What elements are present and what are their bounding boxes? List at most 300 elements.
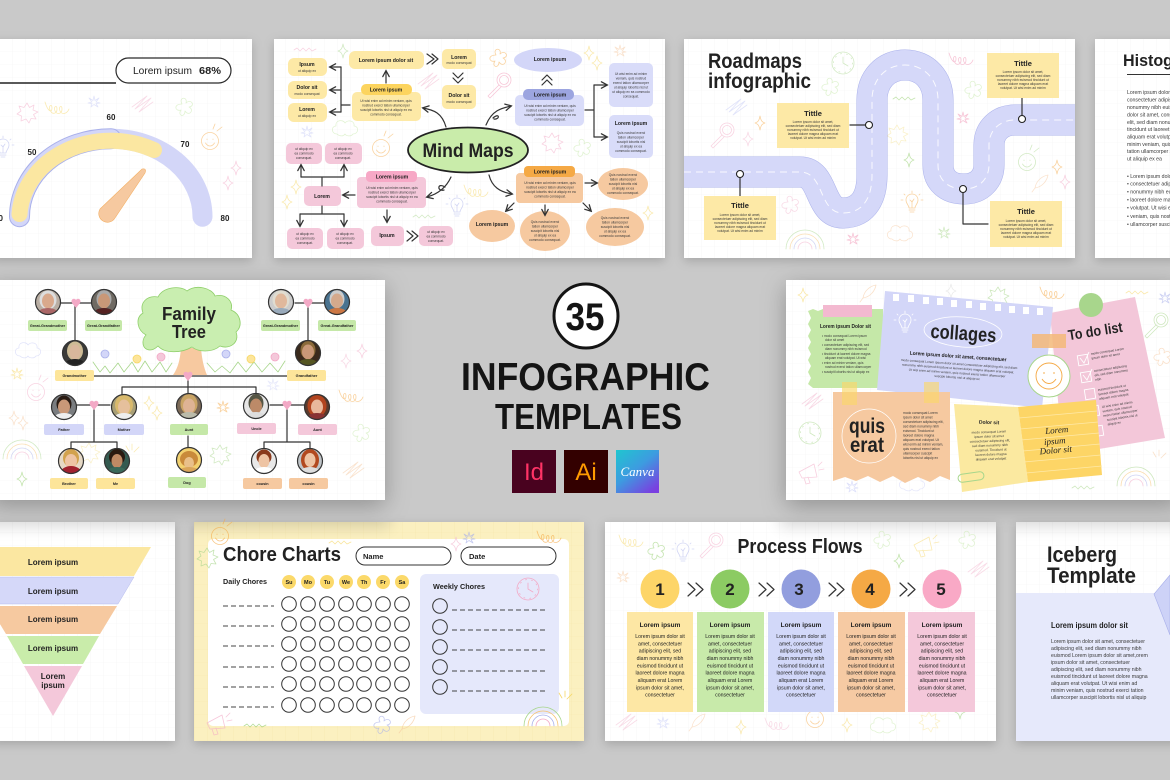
yellow branch: modo consequat [446,100,472,104]
yellow branch: Dolor sit [296,85,318,91]
yellow notebook note [954,400,1102,492]
family name tags: Aunt [185,428,194,432]
callout: tittle 2: consectetuer adipiscing elit, sed diam [996,74,1051,78]
callout: tittle 2: volutpat. Ut wisi enim ad minim [1000,86,1046,90]
panel: collages [786,280,1170,500]
yellow branch: nostrud exerci tation ullamcorper [362,104,411,108]
orange branch: suscipit lobortis nisl [601,225,629,229]
step 5 card: Lorem ipsum dolor sit [917,634,967,640]
step 3 card: aliquam erat Lorem [779,678,823,684]
pink branch: ea commodo [426,234,446,238]
step 1 card: diam nonummy nibh [637,656,683,662]
iceberg text block: Lorem ipsum dolor sit amet, consectetuer [1051,639,1145,645]
iceberg title: Iceberg [1047,542,1117,567]
weekday badges [282,575,409,589]
doodles: roadmaps card [711,52,1070,249]
callout: tittle 1: Lorem ipsum dolor sit amet, [793,120,833,124]
purple branch: ut aliquip ex ea commodo [612,90,650,94]
pink branch: ut aliquip ex [296,232,314,236]
orange note: quis erat: consectetuer adipiscing elit, [903,420,944,424]
pink branch: ut aliquip ex [334,147,352,151]
yellow notebook note: Lorem [1044,424,1069,436]
weekday badges: Th [361,580,368,586]
step circles: 4 [865,580,875,599]
pyramid labels: Lorem ipsum [28,615,78,624]
central bubble: Mind Maps: Mind Maps [422,140,514,162]
step circles: 3 [794,580,804,599]
purple branch: Ut wisi enim ad minim [615,72,647,76]
family name tags: Great-Grandmother [30,324,66,328]
family name tags: Me [113,482,118,486]
pyramid labels: ipsum [41,681,65,690]
step 2 card: consectetuer [715,692,745,698]
step 2 card [697,612,764,712]
callout: tittle 3: Lorem ipsum dolor sit amet, [720,213,760,217]
name field [356,547,451,565]
grass and flowers [93,350,285,373]
panel: mind maps [274,39,665,258]
yellow branch: Lorem ipsum [370,88,403,94]
orange note: quis erat: lobortis nisl ut aliquip ex [903,456,938,460]
pink branch: ut aliquip ex [336,232,354,236]
central bubble: Mind Maps [408,128,528,172]
pink note: to do list: aliquam erat volutpat [1099,392,1129,401]
yellow notebook note: euismod. Tincidunt ut [975,447,1007,453]
iceberg text block: minim veniam, quis nostrud exerci tation [1051,688,1144,694]
step 4 card: consectetuer [856,692,886,698]
callout: tittle 1: nonummy nibh euismod tincidunt ut [787,128,839,132]
icon: Illustrator [564,450,608,493]
purple branch: Lorem ipsum [615,121,648,127]
purple branch: suscipit lobortis nisl ut aliquip ex ea [524,113,576,117]
step 2 card: euismod tincidunt ut [707,664,754,670]
family name tags: Father [58,428,70,432]
pink branch: ea commodo [295,236,315,240]
date field: Date [469,552,485,561]
icon: Canva [616,450,659,493]
yellow notebook note: sed diam nonummy nibh [972,443,1008,448]
step 3 card: consectetuer [786,692,816,698]
orange note: quis erat: laoreet dolore magna [903,434,934,438]
step 4 card: aliquam erat Lorem [849,678,893,684]
step circles: 2 [725,580,735,599]
daily checklist grid [282,597,409,712]
pyramid labels [28,558,78,690]
icon: Illustrator: Ai [575,459,597,486]
centre: heading: INFOGRAPHIC [461,356,710,399]
step 5 card: adipiscing elit, sed [921,648,963,654]
step 3 card: diam nonummy nibh [778,656,824,662]
chore title: Chore Charts [223,543,341,566]
callout: tittle 3: nonummy nibh euismod tincidunt ut [714,221,766,225]
green note: • tincidunt ut laoreet dolore magna [822,352,871,356]
yellow notebook note: modo consequat Lorem [972,429,1007,435]
orange branch: tation ullamcorper [610,178,637,182]
purple note: collages: Ut wisi enim ad minim veniam, quis nostrud exerci tation ullamcorper [909,368,1006,378]
step 2 card: ipsum dolor sit amet, [706,686,754,692]
step 1 card: consectetuer [645,692,675,698]
gauge scale labels [0,113,230,223]
callout: tittle 2: Lorem ipsum dolor sit amet, [1003,70,1043,74]
step 1 card: ipsum dolor sit amet, [636,686,684,692]
road pins and leader lines [736,98,1026,224]
green note: • enim ad minim veniam, quis [822,361,864,365]
orange branch: Ut wisi enim ad minim veniam, quis [524,181,576,185]
pink branch: commodo consequat. [376,200,408,204]
step 4 card: adipiscing elit, sed [850,648,892,654]
purple branch: ut aliquip ex ea [620,144,642,148]
yellow branch: Dolor sit [448,93,470,99]
step 5 card: ipsum dolor sit amet, [918,686,966,692]
tree illustration [138,287,240,375]
pink branch [286,143,453,249]
purple note: collages: collages [930,321,997,347]
gauge needle [99,169,146,222]
step circles: 1 [655,580,665,599]
panel: roadmaps [684,39,1075,258]
gauge scale labels: 80 [221,214,230,223]
orange branch: Quis nostrud exerci [601,216,629,220]
weekday badges: Sa [399,580,406,586]
step 2 card: Lorem ipsum [710,622,751,629]
orange branch: suscipit lobortis nisl [609,182,637,186]
iceberg title [1047,542,1136,588]
step 5 card: consectetuer [927,692,957,698]
callout: tittle 3: Tittle [731,201,749,210]
orange branch: Lorem ipsum [534,170,567,176]
weekday badges: Fr [380,580,387,586]
pink branch: ea commodo [333,152,353,156]
chevron arrows [688,583,915,596]
orange note: quis erat: ipsum dolor sit amet [903,416,933,420]
step 5 card [908,612,975,712]
step 4 card: laoreet dolore magna [846,670,896,676]
yellow notebook note: laoreet dolore magna [975,452,1007,457]
pink branch: Lorem ipsum [376,174,409,180]
step circles [640,570,962,608]
family name tags: Uncle [251,427,262,431]
pyramid labels: Lorem ipsum [28,558,78,567]
callout: tittle 3: consectetuer adipiscing elit, sed diam [713,217,768,221]
pink note: to do list: To do list [1067,320,1124,344]
tree illustration: Family [162,304,216,324]
orange branch: tation ullamcorper [532,224,559,228]
tape and smiley sticker [1028,334,1070,397]
title: Roadmaps infographic: Roadmaps [708,50,802,73]
orange branch: commodo consequat. [607,191,639,195]
orange branch: Lorem ipsum [476,222,509,228]
family name tags [28,320,356,489]
callout: tittle 2: laoreet dolore magna aliquam erat [998,82,1048,86]
panel: process flows [605,506,1170,741]
callout: tittle 4 [990,201,1062,247]
step 2 card: Lorem ipsum dolor sit [705,634,755,640]
iceberg text block: adipiscing elit, sed diam nonummy nibh [1051,667,1142,673]
yellow branch: modo consequat [294,92,320,96]
purple branch: nostrud exerci tation ullamcorper [526,108,575,112]
iceberg text block: Lorem ipsum dolor sit [1051,621,1128,630]
orange branch: ut aliquip ex ea [534,234,556,238]
process title: Process Flows [738,536,862,558]
pink note: to do list: nibh [1095,377,1102,382]
purple note: collages [877,291,1053,408]
step 3 card: euismod tincidunt ut [778,664,825,670]
purple branch: Ut wisi enim ad minim veniam, quis [524,104,576,108]
doodles: mind maps card [282,44,653,220]
family name tags: Grandmother [62,374,87,378]
iceberg text block: euismod Lorem ipsum dolor sit amet,orem [1051,653,1148,659]
step 5 card: aliquam erat Lorem [920,678,964,684]
histogram paragraph: ut aliquip ex ea [1127,156,1162,162]
panel: iceberg [1012,522,1170,748]
doodles: family card [3,343,369,486]
yellow branch: Lorem [299,107,315,113]
step 1 card: Lorem ipsum [640,622,681,629]
pink branch: Ut wisi enim ad minim veniam, quis [366,186,418,190]
purple branch: Lorem ipsum [534,57,567,63]
iceberg text block: adipiscing elit, sed diam nonummy nibh [1051,646,1142,652]
pink note: to do list [1050,293,1165,455]
green note: • suscipit lobortis nisl ut aliquip ex [822,370,870,374]
orange branch: commodo consequat. [529,238,561,242]
callout: tittle 2: nonummy nibh euismod tincidunt ut [997,78,1049,82]
weekday badges: Su [285,580,293,586]
step circles: 5 [936,580,946,599]
daily dashed lines [223,606,274,707]
step 4 card: euismod tincidunt ut [848,664,895,670]
name field: Name [363,552,383,561]
pink note: to do list: euismod tincidunt ut [1098,384,1126,392]
centre: heading: TEMPLATES [495,396,682,437]
gauge scale labels: 70 [181,140,190,149]
step 3 card [768,612,834,712]
step 1 card: amet, consectetuer [638,642,682,648]
weekly chores panel: Weekly Chores [433,582,485,591]
weekly chores panel [420,574,572,726]
gauge arc [20,139,202,217]
title: Roadmaps infographic: infographic [708,70,811,93]
purple branch: ut aliquip lobortis nisl ut [614,86,648,90]
step 5 card: amet, consectetuer [920,642,964,648]
pink note: to do list: laoreet dolore magna [1098,388,1129,396]
pink branch: ea commodo [294,152,314,156]
green note: nostrud exerci tation ullamcorper [825,365,872,369]
purple note: collages: nonummy nibh euismod tincidunt ut laoreet dolore magna aliquam erat volutpat. [902,363,1014,374]
doodles: collage card [798,284,1170,492]
step 4 card: diam nonummy nibh [848,656,894,662]
pink note: to do list: aliquip ex [1107,420,1122,426]
step 3 card: Lorem ipsum dolor sit [776,634,826,640]
orange note: quis erat: euismod. Tincidunt ut [903,429,934,433]
yellow branch: modo consequat [446,61,472,65]
orange branch: commodo consequat. [534,194,566,198]
purple branch: exerci tation ullamcorper [613,81,650,85]
callout: tittle 1: laoreet dolore magna aliquam erat [788,132,838,136]
yellow branch: ut aliquip ex [298,114,316,118]
panel: histogram [1095,39,1170,258]
pink note: to do list: ipsum dolor sit amet [1091,352,1120,360]
pyramid bands [0,547,151,716]
step 2 card: adipiscing elit, sed [709,648,751,654]
icon: Canva: Canva [621,464,655,479]
panel: gauge template [0,39,252,258]
pink branch: ea commodo [335,236,355,240]
iceberg shape [1154,575,1170,635]
step 1 card: adipiscing elit, sed [639,648,681,654]
callout: tittle 1: consectetuer adipiscing elit, sed diam [786,124,841,128]
green note: aliquam erat volutpat. Ut wisi [825,356,866,360]
green note [808,305,884,388]
pink branch: consequat. [297,241,313,245]
callout: tittle 4: laoreet dolore magna aliquam erat [1001,231,1051,235]
callout: tittle 4: consectetuer adipiscing elit, sed diam [999,223,1054,227]
orange branch: Quis nostrud exerci [609,173,637,177]
orange branch: nostrud exerci tation ullamcorper [526,186,575,190]
step 3 card: laoreet dolore magna [776,670,826,676]
family name tags: Great-Grandfather [321,324,354,328]
purple branch: consequat. [623,94,639,98]
callout: tittle 1 [777,103,849,148]
pink branch: consequat. [335,156,351,160]
family name tags: Aunt [313,428,323,432]
yellow notebook note: Dolor sit [979,420,1000,426]
gauge scale labels: 60 [107,113,116,122]
step 4 card: ipsum dolor sit amet, [847,686,895,692]
step 2 card: diam nonummy nibh [707,656,753,662]
pink note: to do list: consectetuer adipiscing [1094,364,1127,373]
green note: dolor sit amet [825,338,844,342]
yellow branch [288,49,476,122]
pink branch: nostrud exerci tation ullamcorper [368,190,417,194]
icon: InDesign [512,450,556,493]
iceberg text block: ipsum dolor sit amet, consectetuer [1051,660,1130,666]
gauge scale labels: 50 [28,148,37,157]
callout: tittle 4: Tittle [1017,207,1035,216]
step 2 card: aliquam erat Lorem [708,678,752,684]
panel: family tree [0,280,385,500]
purple branch: Quis nostrud exerci [617,131,645,135]
panel: pyramid [0,522,178,748]
orange branch: commodo consequat. [599,234,631,238]
gauge pill: Lorem ipsum 68%: 68% [199,66,221,77]
weekday badges: Mo [304,580,313,586]
pink branch: consequat. [337,241,353,245]
orange note: quis erat: erat [850,434,884,457]
pink note: to do list: exerci tation ullamcorper [1103,408,1139,418]
pyramid labels: Lorem ipsum [28,644,78,653]
family connectors [60,303,325,450]
weekday badges: Tu [324,580,330,586]
pink branch: consequat. [428,239,444,243]
step 3 card: ipsum dolor sit amet, [777,686,825,692]
pink branch: ut aliquip ex [427,230,445,234]
title: Roadmaps infographic [708,50,811,93]
orange branch: ut aliquip ex ea [604,230,626,234]
pink branch: suscipit lobortis nisl ut aliquip ex ea [366,195,418,199]
step 1 card: laoreet dolore magna [635,670,685,676]
date field [461,547,556,565]
orange branch: Quis nostrud exerci [531,220,559,224]
orange note: quis erat [833,382,950,483]
orange note: quis erat: aliquam erat volutpat. Ut [903,438,939,442]
pyramid labels: Lorem ipsum [28,587,78,596]
step 1 card: euismod tincidunt ut [637,664,684,670]
callout: tittle 4: volutpat. Ut wisi enim ad minim [1003,235,1049,239]
family portraits [36,290,350,482]
step 1 card: aliquam erat Lorem [638,678,682,684]
callout: tittle 1: Tittle [804,109,822,118]
orange note: quis erat: modo consequat Lorem [903,411,938,415]
purple branch: commodo consequat. [534,118,566,122]
pink note: to do list: veniam, quis nostrud [1102,405,1132,413]
iceberg text block: ullamcorper suscipit lobortis nisl ut aliquip [1051,695,1147,701]
iceberg text block: euismod tincidunt ut laoreet dolore magna [1051,674,1148,680]
callout: tittle 3: laoreet dolore magna aliquam erat [715,225,765,229]
callout: tittle 2 [987,53,1059,98]
centre: heading [461,356,710,437]
family name tags: Mother [118,428,131,432]
family name tags: Great-Grandfather [87,324,120,328]
step 4 card [838,612,905,712]
step 3 card: adipiscing elit, sed [780,648,822,654]
step 5 card: Lorem ipsum [922,622,963,629]
doodles: process card [616,531,989,734]
purple note: collages: modo consequat Lorem ipsum dolor sit amet consectetuer adipiscing elit, sed diam [901,358,1018,370]
step 2 card: amet, consectetuer [708,642,752,648]
family name tags: Dog [183,481,191,485]
step 5 card: euismod tincidunt ut [919,664,966,670]
pink branch: Lorem [314,194,330,200]
pink branch: ut aliquip ex [295,147,313,151]
orange branch: suscipit lobortis nisl ut aliquip ex ea [524,190,576,194]
yellow notebook note: Dolor sit [1038,444,1073,456]
step 5 card: diam nonummy nibh [919,656,965,662]
doodles: chore card [197,519,561,735]
green note: • modo consequat Lorem ipsum [822,334,867,338]
yellow branch: Lorem ipsum dolor sit [359,58,414,64]
yellow branch: Lorem [451,55,467,61]
callout: tittle 1: volutpat. Ut wisi enim ad minim [790,136,836,140]
green note: Lorem ipsum Dolor sit [820,324,871,330]
yellow branch: commodo consequat. [370,112,402,116]
step 1 card [627,612,693,712]
histogram paragraph [1127,90,1170,228]
iceberg text block: aliquam erat volutpat. Ut wisi enim ad [1051,681,1137,687]
orange note: quis erat: ullamcorper suscipit [903,452,932,456]
callout: tittle 3: volutpat. Ut wisi enim ad minim [717,229,763,233]
pink note: to do list: modo consequat Lorem [1091,347,1125,356]
step 4 card: Lorem ipsum [851,622,892,629]
purple branch: commodo consequat. [615,149,647,153]
orange branch [469,166,648,251]
panel: chore charts [190,518,588,748]
doodles: gauge card [0,96,241,190]
pyramid labels: Lorem [41,672,65,681]
orange branch: tation ullamcorper [602,220,629,224]
pink note: to do list: suscipit lobortis nisl ut [1107,413,1138,422]
yellow notebook note: aliquam erat volutpat [976,456,1006,462]
purple branch: suscipit lobortis nisl [617,140,645,144]
green note: diam nonummy nibh euismod [825,347,867,351]
yellow notebook note: consectetuer adipiscing elit, [970,438,1010,444]
yellow notebook note: ipsum dolor sit amet [974,434,1004,439]
callout: tittle 4: nonummy nibh euismod tincidunt ut [1000,227,1052,231]
yellow branch: Ut wisi enim ad minim veniam, quis [360,99,412,103]
purple note: collages: suscipit lobortis nisl ut aliquip ex [934,374,980,381]
gauge pill: Lorem ipsum 68%: Lorem ipsum [133,66,192,77]
orange note: quis erat: quis [849,415,885,438]
step 1 card: Lorem ipsum dolor sit [635,634,685,640]
